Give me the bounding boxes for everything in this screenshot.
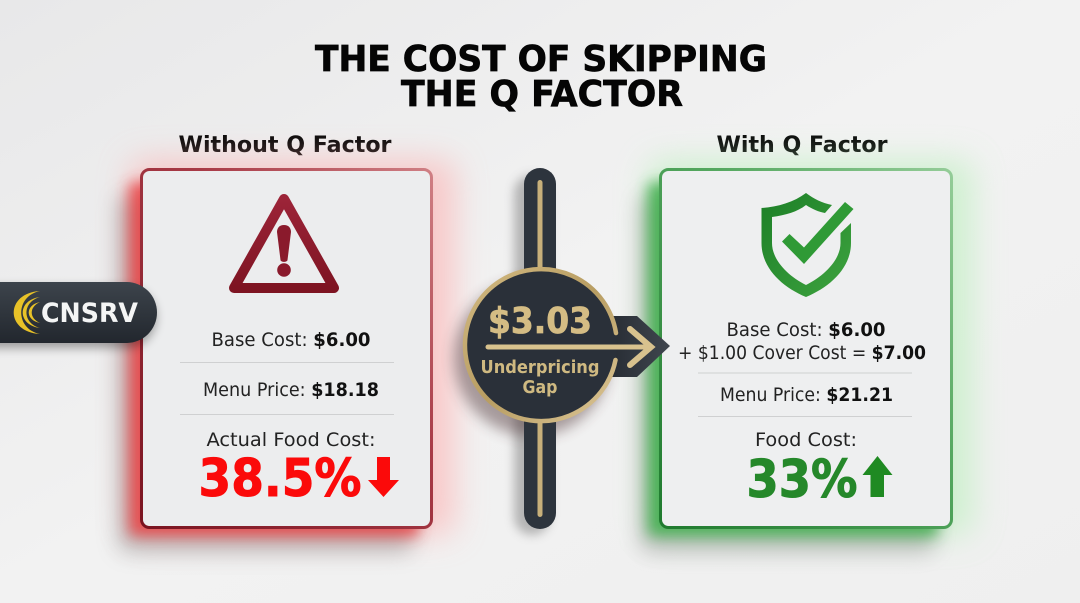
text: menu price: Menu Price: $21.21 (720, 384, 893, 406)
title: THE Q FACTOR (401, 74, 683, 115)
panel glow: green (640, 160, 973, 552)
icon: up arrow (862, 456, 892, 497)
panel glow: red (118, 160, 455, 552)
icon: warning triangle (234, 199, 334, 288)
title: THE COST OF SKIPPING (315, 39, 767, 80)
panel: without Q factor (118, 132, 455, 552)
card: with Q factor (660, 170, 952, 528)
stat: 38.5%: 38.5% (198, 449, 362, 509)
label: underpricing gap: Underpricing (480, 358, 600, 378)
connector shadow (454, 175, 610, 535)
icon: down arrow (368, 457, 399, 497)
text: base cost: Base Cost: $6.00 (726, 319, 886, 341)
connector: underpricing gap: Gap (522, 378, 558, 398)
connector: underpricing gap (454, 168, 670, 535)
arrow tab (600, 316, 670, 377)
text: food cost: Food Cost: (755, 429, 857, 451)
icon: signal arcs (14, 291, 40, 334)
panel: with Q factor (640, 132, 973, 552)
logo badge: CNSRV (0, 282, 157, 348)
logo text: CNSRV (41, 298, 138, 329)
value: $3.03: $3.03 (488, 301, 592, 342)
text: menu price: Menu Price: $18.18 (203, 379, 379, 401)
heading: with Q factor: With Q Factor (716, 132, 888, 158)
icon: shield with check (762, 193, 854, 297)
stat: 33%: 33% (746, 450, 858, 510)
heading: without Q factor: Without Q Factor (178, 132, 392, 158)
text: base cost: Base Cost: $6.00 (212, 329, 370, 351)
arrow (488, 329, 651, 365)
text: cover cost: + $1.00 Cover Cost = $7.00 (678, 342, 926, 364)
card: without Q factor (142, 170, 432, 528)
title (315, 39, 767, 115)
text: actual food cost: Actual Food Cost: (206, 429, 376, 451)
medallion (465, 269, 617, 421)
vertical bar (524, 168, 556, 529)
